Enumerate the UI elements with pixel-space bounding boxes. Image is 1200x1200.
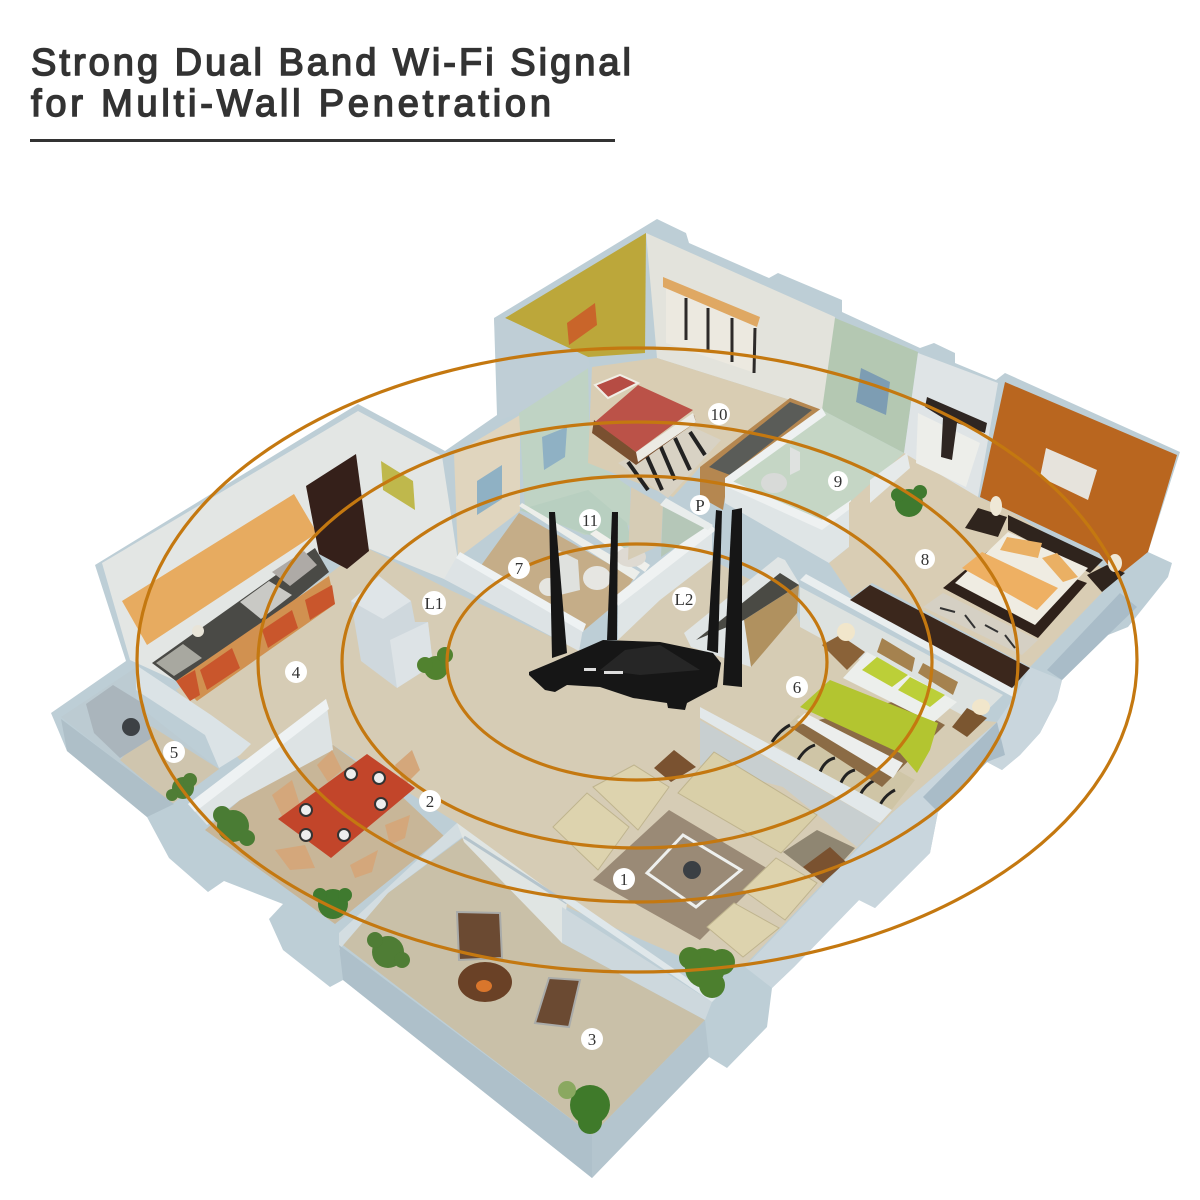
room number labels: L2 <box>675 590 693 609</box>
panel: bedroom 6 <box>700 574 1017 813</box>
panel: wardrobe L2 <box>684 557 799 667</box>
room number labels <box>163 403 935 1050</box>
panel: dining room 2 <box>188 699 444 924</box>
room number labels: 1 <box>620 870 628 889</box>
room number labels: 11 <box>582 511 598 530</box>
panel: living room 1 <box>553 707 892 998</box>
icon: router <box>529 508 742 710</box>
room number labels: 7 <box>515 559 524 578</box>
panel: bedroom 10 <box>494 233 835 510</box>
panel: laundry room 5 <box>61 665 251 817</box>
room number labels: 8 <box>921 550 929 569</box>
title <box>31 42 631 125</box>
room number labels: 10 <box>710 405 728 424</box>
outer walls <box>51 219 1180 1178</box>
main floor <box>176 547 975 965</box>
title: Strong Dual Band Wi-Fi Signal <box>31 42 631 84</box>
room number labels: P <box>695 496 705 515</box>
panel: outer right wall and corner <box>745 593 1137 988</box>
panel: kitchen <box>102 411 579 701</box>
room number labels: 4 <box>292 663 301 682</box>
panel: fridge and plant <box>351 576 453 688</box>
room number labels: 3 <box>588 1030 596 1049</box>
panel: bathrooms 7 and 11 <box>444 367 716 651</box>
panel: bedroom 8 <box>829 353 1177 688</box>
title: for Multi-Wall Penetration <box>31 83 551 125</box>
room number labels: L1 <box>425 594 443 613</box>
panel: balcony 3 <box>339 823 716 1178</box>
floor plan <box>51 219 1180 1178</box>
title underline <box>30 139 615 142</box>
room number labels: 5 <box>170 743 178 762</box>
room number labels: 2 <box>426 792 434 811</box>
wifi signal rings <box>137 348 1137 972</box>
panel: bathroom 9 <box>725 318 918 563</box>
room number labels: 6 <box>793 678 801 697</box>
room number labels: 9 <box>834 472 842 491</box>
